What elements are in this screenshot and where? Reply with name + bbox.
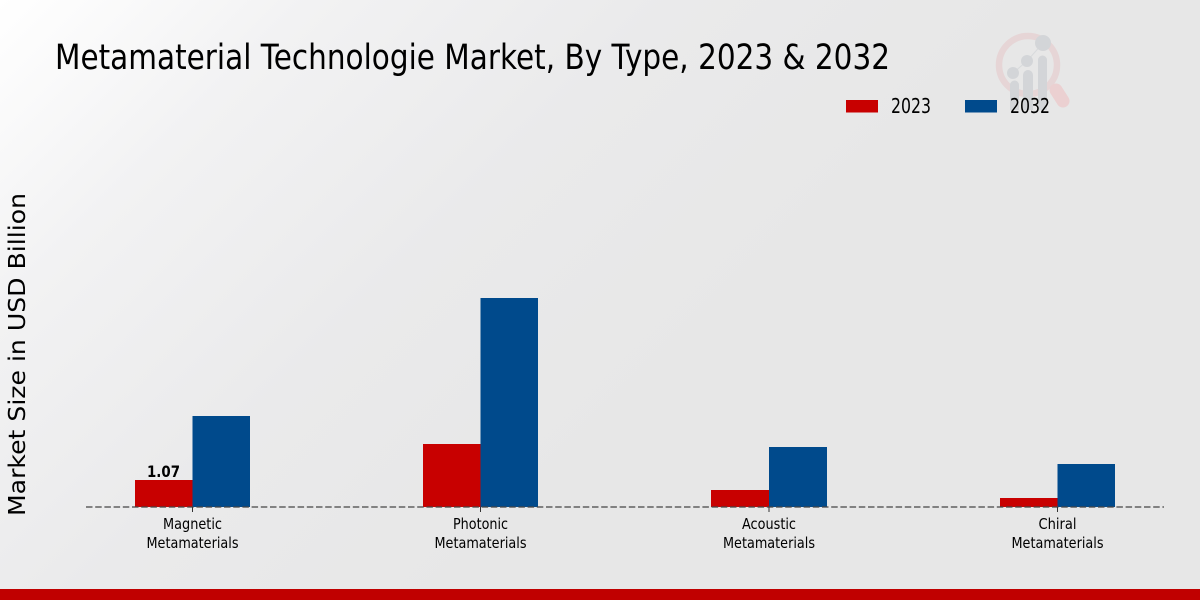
group: Acoustic Metamaterials	[711, 447, 827, 507]
icon: watermark logo	[999, 35, 1063, 110]
legend: 2032: 2032	[1010, 94, 1050, 118]
label: Acoustic Metamaterials: Acoustic	[742, 515, 796, 533]
bar chart	[86, 298, 1164, 552]
label: Chiral Metamaterials	[1012, 515, 1104, 552]
label: Magnetic Metamaterials	[146, 515, 238, 552]
x axis baseline	[86, 507, 1164, 512]
label: Photonic Metamaterials	[434, 515, 526, 552]
label: Acoustic Metamaterials	[723, 515, 815, 552]
label: Photonic Metamaterials: Photonic	[453, 515, 508, 533]
group: Magnetic Metamaterials	[135, 416, 250, 507]
label: Magnetic Metamaterials: Metamaterials	[146, 534, 238, 552]
legend: 2023	[846, 94, 931, 118]
group: Chiral Metamaterials	[1000, 464, 1115, 507]
value label: 1.07	[147, 462, 180, 481]
label: Acoustic Metamaterials: Metamaterials	[723, 534, 815, 552]
legend: 2032	[965, 94, 1050, 118]
legend: 2023: 2023	[891, 94, 931, 118]
label: Photonic Metamaterials: Metamaterials	[434, 534, 526, 552]
group: Photonic Metamaterials	[423, 298, 538, 507]
y-axis title: Market Size in USD Billion	[5, 193, 31, 516]
footer bar	[0, 589, 1200, 600]
label: Chiral Metamaterials: Chiral	[1038, 515, 1076, 533]
label: Chiral Metamaterials: Metamaterials	[1012, 534, 1104, 552]
legend	[846, 94, 1050, 118]
x-axis labels	[146, 515, 1104, 552]
title: Metamaterial Technologie Market, By Type, 2023 & 2032	[55, 38, 890, 78]
label: Magnetic Metamaterials: Magnetic	[163, 515, 222, 533]
